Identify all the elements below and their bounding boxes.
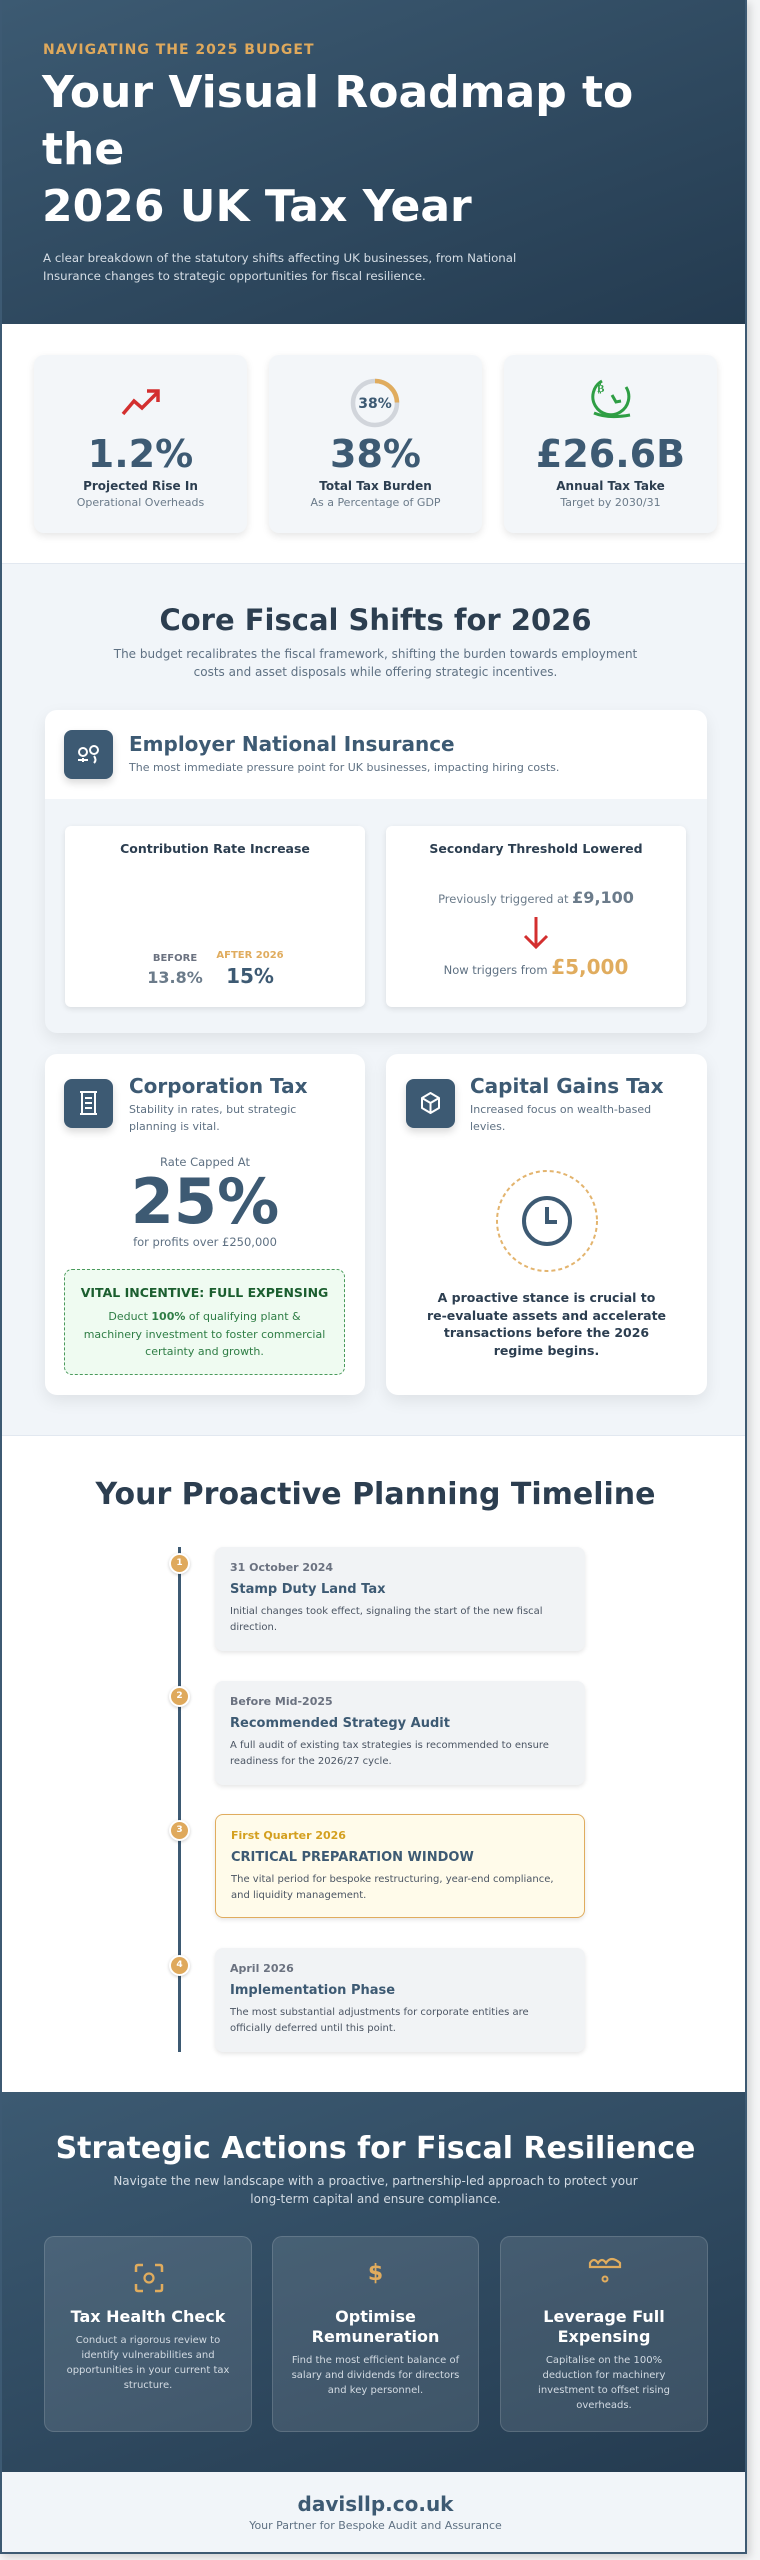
icon: dollar: $: [368, 2261, 383, 2286]
icon: donut 38%: [350, 378, 400, 428]
dot 2: [169, 1686, 190, 1707]
main title: 2026 UK Tax Year: [42, 181, 472, 232]
icon: green money cycle: [591, 380, 630, 418]
timeline item 3 (critical): CRITICAL PREPARATION WINDOW: [231, 1850, 474, 1865]
icon: people: [64, 730, 113, 779]
timeline item 2: Before Mid-2025: [230, 1695, 333, 1708]
header banner: [2, 0, 749, 324]
stat card: £26.6B: Target by 2030/31: [560, 496, 661, 509]
icon: clock: [496, 1170, 598, 1272]
callout: full expensing: Deduct 100% of qualifying plant & machinery investment to foster commercial certainty and growth.: [84, 1310, 325, 1358]
stat card: 1.2%: [34, 355, 247, 533]
after value: 15%: [226, 964, 274, 988]
timeline item 3 (critical): The vital period for bespoke restructuring, year-end compliance, and liquidity management.: [231, 1874, 554, 1901]
dot 1: [169, 1553, 190, 1574]
stat card: 1.2%: Operational Overheads: [77, 496, 204, 509]
timeline item 1: [215, 1547, 585, 1651]
timeline item 1: Initial changes took effect, signaling the start of the new fiscal direction.: [230, 1606, 543, 1633]
section: strategic actions: Navigate the new landscape with a proactive, partnership-led approach to protect your long-term capital and ensure compliance.: [113, 2174, 638, 2206]
dot 1: 1: [176, 1558, 183, 1568]
icon: donut 38%: 38%: [358, 396, 392, 412]
icon: green money cycle: ₿: [597, 382, 605, 395]
subcard: secondary threshold: [386, 826, 686, 1007]
stat card: £26.6B: Annual Tax Take: [556, 479, 665, 493]
subcard: secondary threshold: Now triggers from £5,000: [444, 955, 628, 979]
timeline item 2: Recommended Strategy Audit: [230, 1716, 450, 1731]
heading: Core Fiscal Shifts for 2026: [159, 603, 592, 637]
panel: corporation tax: Corporation Tax: [129, 1074, 308, 1098]
subcard: secondary threshold: Secondary Threshold Lowered: [429, 841, 643, 856]
callout: full expensing: [64, 1269, 345, 1375]
dot 2: 2: [176, 1691, 183, 1701]
timeline item 2: A full audit of existing tax strategies is recommended to ensure readiness for the 2026/27 cycle.: [230, 1740, 549, 1767]
stat card: 1.2%: Projected Rise In: [83, 479, 198, 493]
stat card: £26.6B: [504, 355, 717, 533]
panel: corporation tax: [45, 1054, 365, 1395]
dot 4: 4: [176, 1960, 183, 1970]
action card: leverage full expensing: Capitalise on the 100% deduction for machinery investment to offset rising overheads.: [538, 2355, 670, 2411]
icon: scan: [134, 2264, 164, 2292]
after value: [216, 950, 284, 988]
dot 3: 3: [176, 1825, 183, 1835]
timeline item 3 (critical): First Quarter 2026: [231, 1829, 346, 1842]
dot 4: [169, 1955, 190, 1976]
timeline item 1: Stamp Duty Land Tax: [230, 1582, 385, 1597]
action card: tax health check: [44, 2236, 252, 2432]
heading: Your Proactive Planning Timeline: [96, 1477, 655, 1512]
timeline item 3 (critical): [215, 1814, 585, 1918]
icon: trend up: [122, 389, 160, 416]
action card: tax health check: Tax Health Check: [71, 2307, 225, 2326]
footer: davisllp.co.uk: [298, 2492, 453, 2516]
panel: capital gains tax: Increased focus on wealth-based levies.: [470, 1103, 651, 1133]
big 25% stat: 25%: [131, 1165, 279, 1238]
main title: [42, 67, 633, 232]
heading: Strategic Actions for Fiscal Resilience: [56, 2131, 695, 2166]
timeline item 4: Implementation Phase: [230, 1983, 395, 1998]
section: strategic actions: [2, 2092, 749, 2472]
footer: [2, 2472, 749, 2554]
main title: Your Visual Roadmap to the: [42, 67, 633, 175]
panel: corporation tax: Stability in rates, but strategic planning is vital.: [129, 1103, 296, 1133]
action card: optimise remuneration: Remuneration: [312, 2327, 439, 2346]
panel: capital gains tax: [386, 1054, 707, 1395]
panel: employer national insurance: The most immediate pressure point for UK businesses, impacting hiring costs.: [129, 761, 559, 774]
action card: leverage full expensing: Leverage Full: [543, 2307, 665, 2326]
stat card: 38%: Total Tax Burden: [319, 479, 432, 493]
dot 3: [169, 1820, 190, 1841]
before value: BEFORE: [153, 953, 197, 964]
header subtitle: A clear breakdown of the statutory shifts affecting UK businesses, from National Insurance changes to strategic opportunities for fiscal resilience.: [43, 251, 516, 283]
stat card: 1.2%: 1.2%: [88, 432, 193, 476]
icon: document: [64, 1079, 113, 1128]
before value: [147, 953, 203, 987]
action card: tax health check: Conduct a rigorous review to identify vulnerabilities and opportunities in your current tax structure.: [67, 2335, 229, 2391]
title: Employer National Insurance: [129, 732, 455, 756]
stat card: 38%: As a Percentage of GDP: [310, 496, 441, 509]
big 25% stat: for profits over £250,000: [133, 1235, 277, 1249]
icon: machinery: [588, 2258, 622, 2282]
callout text: A proactive stance is crucial to re-evaluate assets and accelerate transactions before the 2026 regime begins.: [427, 1290, 666, 1358]
section subtitle: The budget recalibrates the fiscal framework, shifting the burden towards employment costs and asset disposals while offering strategic incentives.: [114, 647, 637, 679]
stat card: £26.6B: £26.6B: [536, 432, 685, 476]
section: timeline: [2, 1437, 749, 2092]
arrow down: [524, 917, 548, 949]
action card: optimise remuneration: Optimise: [335, 2307, 416, 2326]
action card: leverage full expensing: [500, 2236, 708, 2432]
timeline item 4: [215, 1948, 585, 2052]
subcard: secondary threshold: Previously triggered at £9,100: [438, 888, 634, 907]
action card: optimise remuneration: [272, 2236, 479, 2432]
timeline item 2: [215, 1681, 585, 1785]
subcard: contribution rate: Contribution Rate Increase: [120, 841, 310, 856]
section: core fiscal shifts: [2, 563, 749, 1436]
eyebrow: NAVIGATING THE 2025 BUDGET: [43, 42, 315, 58]
timeline item 4: April 2026: [230, 1962, 294, 1975]
timeline line: [178, 1547, 181, 2052]
footer: Your Partner for Bespoke Audit and Assurance: [249, 2519, 502, 2532]
big 25% stat: Rate Capped At: [160, 1155, 250, 1169]
icon: cube: [406, 1079, 455, 1128]
before value: 13.8%: [147, 968, 203, 987]
subcard: contribution rate: [65, 826, 365, 1007]
after value: AFTER 2026: [216, 950, 284, 961]
stat card: 38%: 38%: [330, 432, 421, 476]
action card: optimise remuneration: Find the most efficient balance of salary and dividends for directors and key personnel.: [292, 2355, 459, 2396]
timeline item 1: 31 October 2024: [230, 1561, 333, 1574]
panel: capital gains tax: Capital Gains Tax: [470, 1074, 664, 1098]
action card: leverage full expensing: Expensing: [558, 2327, 650, 2346]
stat card: 38%: [269, 355, 482, 533]
callout: full expensing: VITAL INCENTIVE: FULL EXPENSING: [81, 1285, 328, 1300]
timeline item 4: The most substantial adjustments for corporate entities are officially deferred until this point.: [230, 2007, 529, 2034]
panel: employer national insurance: [45, 710, 707, 1033]
